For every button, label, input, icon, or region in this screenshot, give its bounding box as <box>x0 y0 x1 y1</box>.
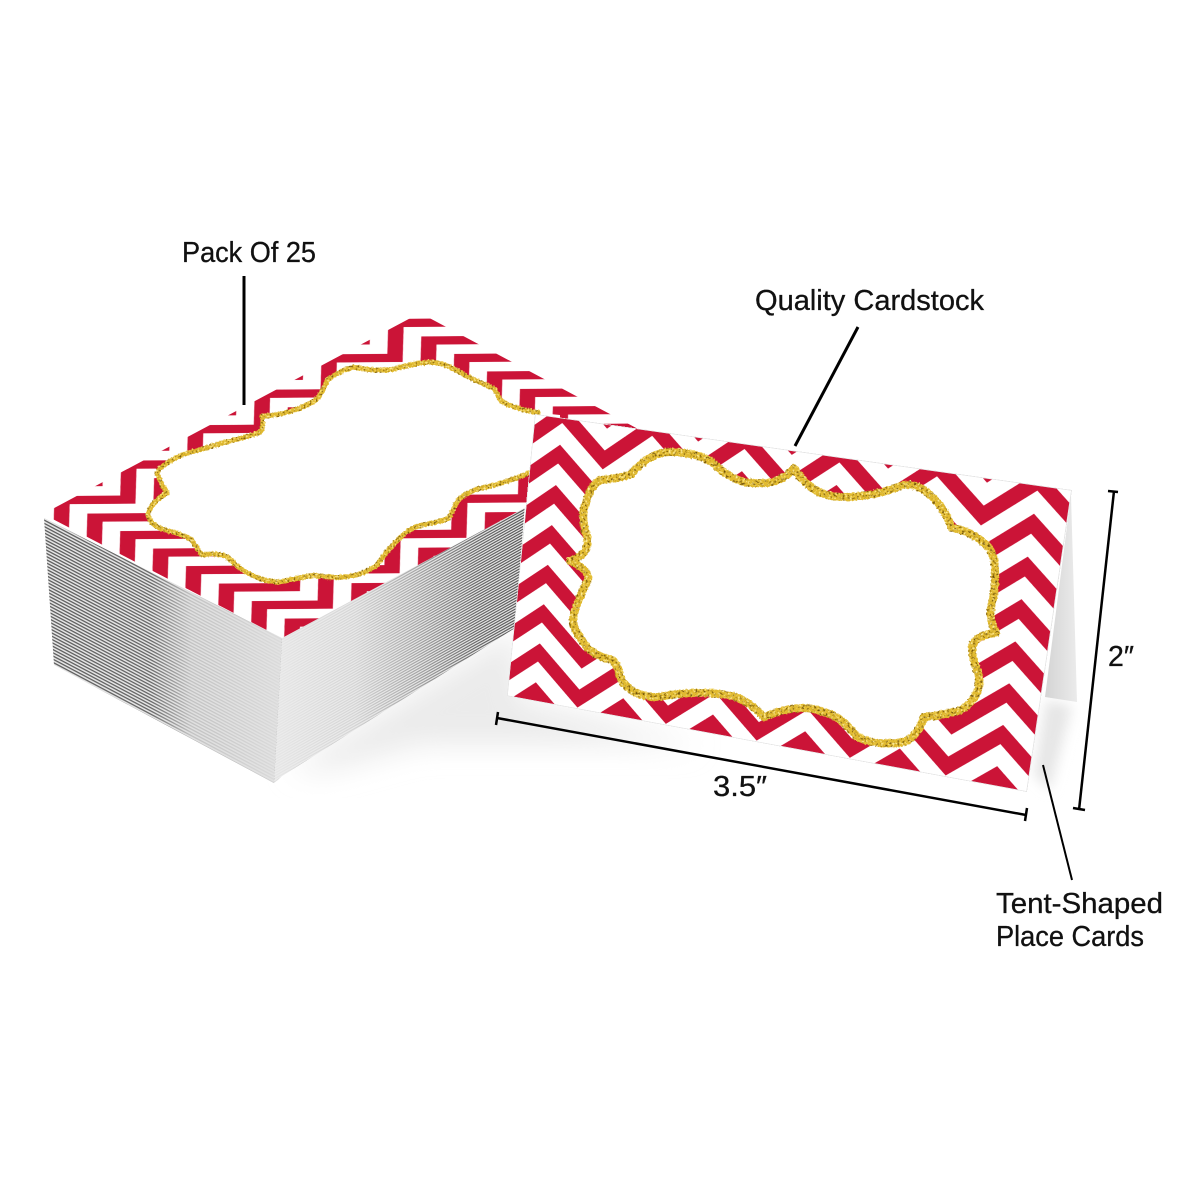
stack top card with chevrons <box>43 313 655 638</box>
dimension: 2 inch height <box>1073 491 1134 810</box>
shadow right of tent card <box>1034 700 1072 790</box>
label: tent-shaped place cards with leader line: Place Cards <box>996 921 1144 953</box>
label: tent-shaped place cards with leader line: Tent-Shaped <box>996 888 1163 920</box>
front tent card with chevron pattern <box>507 414 1072 792</box>
label: pack of 25 with leader line: Pack Of 25 <box>182 237 316 269</box>
stack right side <box>274 503 525 783</box>
label: tent-shaped place cards with leader line <box>996 765 1163 953</box>
dimension: 3.5 inch width: 3.5″ <box>713 771 767 803</box>
stack left side <box>44 518 282 783</box>
dimension: 3.5 inch width <box>496 712 1027 821</box>
stack top gold frame <box>148 362 560 582</box>
tent card back panel <box>1045 495 1077 702</box>
shadow under stack and card <box>290 630 700 770</box>
front card gold glitter frame <box>570 452 996 743</box>
label: quality cardstock with leader line: Quality Cardstock <box>755 285 985 317</box>
dimension: 2 inch height: 2″ <box>1108 641 1134 673</box>
label: quality cardstock with leader line <box>755 285 985 446</box>
